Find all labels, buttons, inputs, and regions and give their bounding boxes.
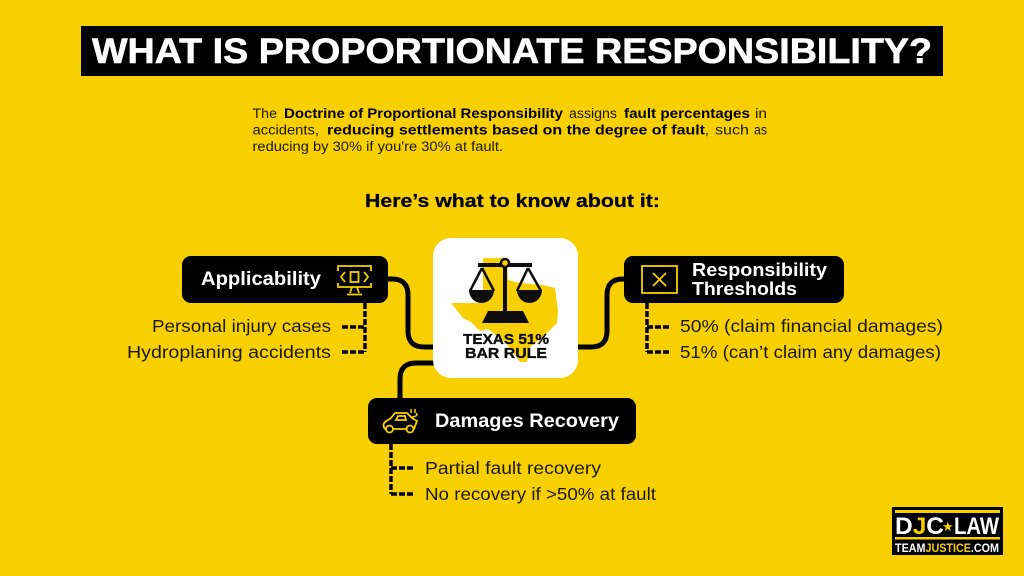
subheading: Here’s what to know about it: — [365, 190, 660, 211]
title: WHAT IS PROPORTIONATE RESPONSIBILITY? — [92, 32, 932, 71]
icon: monitor with code brackets — [338, 266, 371, 294]
icon: X in a box — [642, 266, 677, 293]
connector: applicability to centre — [388, 279, 440, 347]
panel: damages recovery — [368, 398, 636, 444]
icon: scales of justice — [469, 259, 542, 323]
intro paragraph: , — [705, 122, 709, 138]
logo: DJC Law: LAW — [954, 513, 999, 540]
logo: DJC Law: DJC — [895, 513, 944, 540]
panel: damages recovery: Damages Recovery — [435, 411, 619, 432]
connector: damages recovery to centre — [400, 363, 440, 400]
intro paragraph — [252, 106, 767, 154]
centre panel: Texas 51% bar rule: TEXAS 51% — [463, 331, 549, 348]
intro paragraph: assigns — [569, 106, 617, 121]
logo: DJC Law — [892, 507, 1003, 555]
damages list: No recovery if >50% at fault — [425, 484, 656, 504]
damages list: Partial fault recovery — [425, 458, 601, 478]
applicability list — [127, 316, 331, 362]
intro paragraph: in — [755, 106, 767, 121]
intro paragraph: fault percentages — [624, 106, 750, 121]
panel: responsibility thresholds — [624, 256, 844, 303]
thresholds list connector — [647, 303, 671, 352]
panel: applicability: Applicability — [201, 269, 321, 290]
centre panel: Texas 51% bar rule — [433, 238, 578, 378]
applicability list: Personal injury cases — [152, 316, 331, 336]
intro paragraph: as — [754, 122, 767, 138]
logo: DJC Law: ★ — [942, 519, 954, 534]
intro paragraph: Doctrine of Proportional Responsibility — [284, 106, 564, 121]
damages list — [425, 458, 656, 504]
damages list connector — [391, 444, 415, 494]
intro paragraph: accidents, — [252, 122, 319, 138]
connector: responsibility thresholds to centre — [570, 279, 624, 347]
thresholds list: 51% (can’t claim any damages) — [680, 342, 941, 362]
applicability list connector — [342, 303, 365, 352]
intro paragraph: such — [715, 122, 749, 138]
centre panel: Texas 51% bar rule: BAR RULE — [465, 345, 547, 362]
thresholds list — [680, 316, 943, 362]
panel: responsibility thresholds: Thresholds — [692, 278, 797, 299]
Texas map — [451, 258, 558, 362]
icon: overheating car — [384, 409, 417, 432]
applicability list: Hydroplaning accidents — [127, 342, 331, 362]
intro paragraph: reducing by 30% if you're 30% at fault. — [252, 139, 503, 154]
panel: responsibility thresholds: Responsibility — [692, 259, 828, 280]
intro paragraph: The — [252, 106, 277, 121]
logo: DJC Law: TEAMJUSTICE.COM — [895, 541, 999, 555]
intro paragraph: reducing settlements based on the degree of fault — [327, 122, 706, 138]
panel: applicability — [182, 256, 388, 303]
thresholds list: 50% (claim financial damages) — [680, 316, 943, 336]
